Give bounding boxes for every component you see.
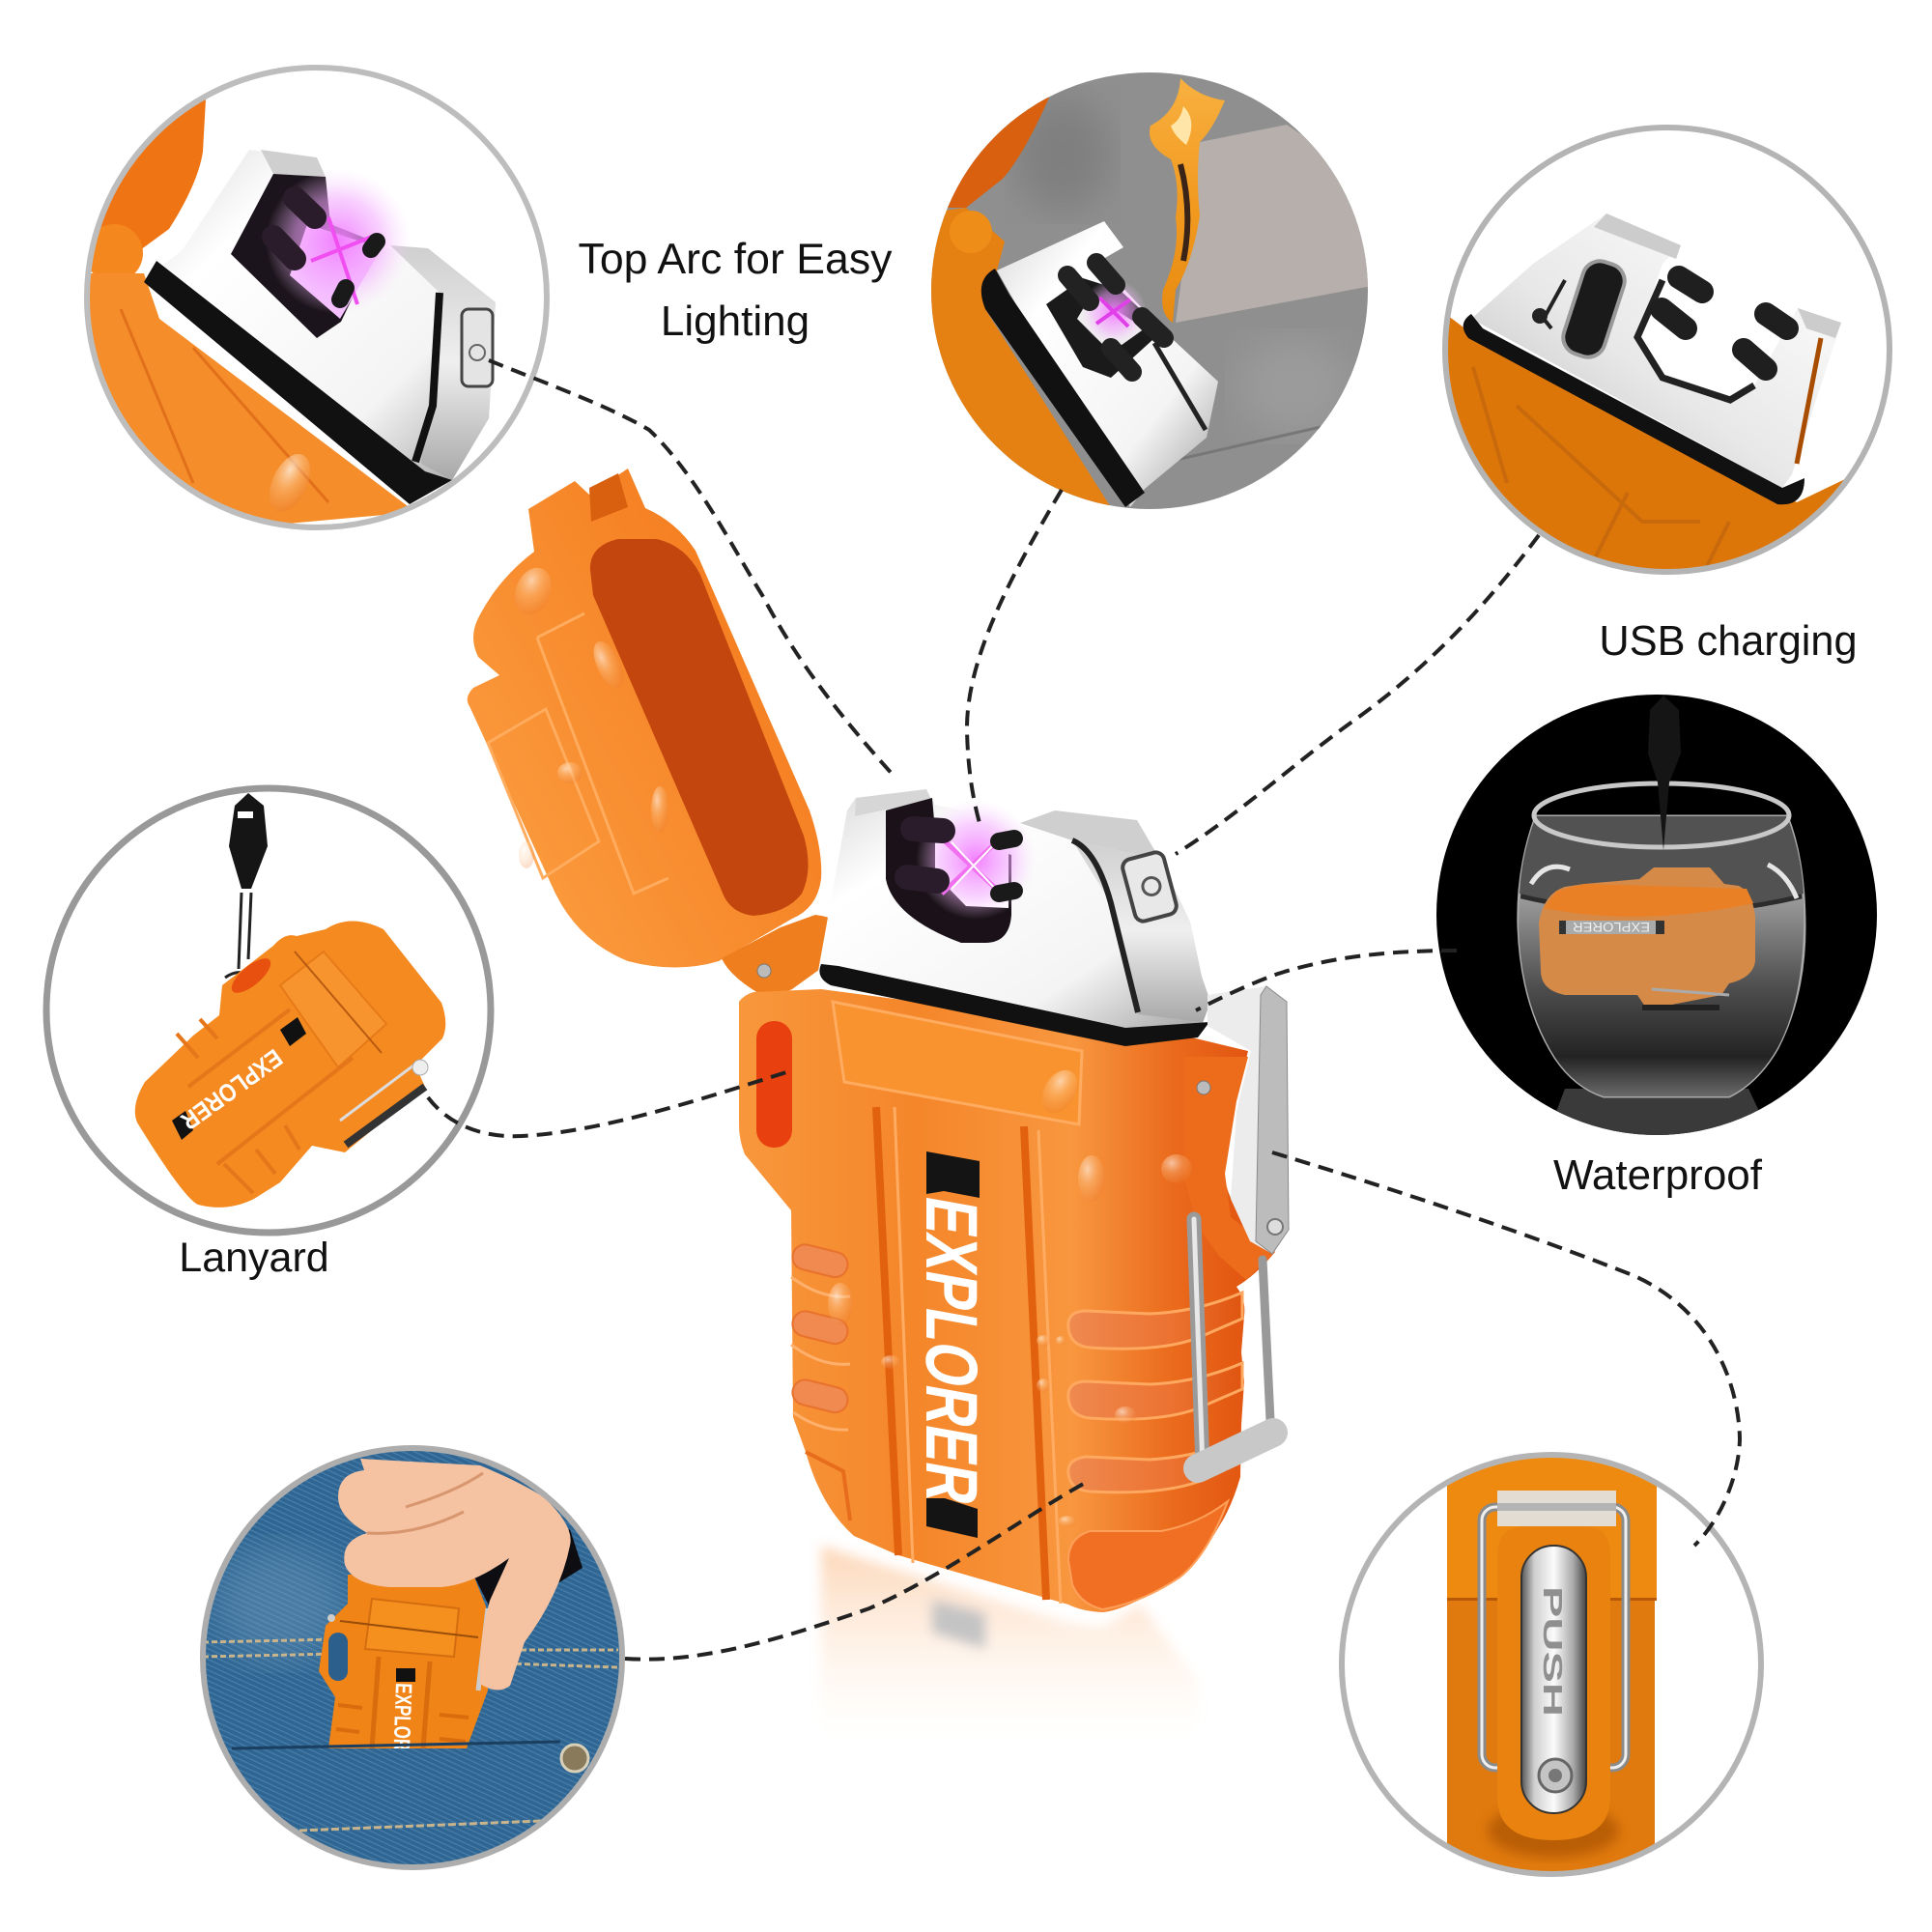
lighter body (739, 989, 1275, 1612)
chrome top with arc (818, 789, 1210, 1046)
wire loop (1482, 1507, 1626, 1768)
chrome (997, 221, 1218, 507)
dashed connector: waterproof inset (1196, 951, 1457, 1010)
lid fragment (100, 99, 206, 249)
floor reflection (821, 1546, 1198, 1739)
inset: belt clip PUSH (1342, 1449, 1761, 1880)
dashed connector: lighting inset (967, 490, 1062, 823)
gasket (819, 964, 1209, 1046)
main product: open orange lighter (468, 469, 1289, 1739)
clip tab (1497, 1526, 1610, 1840)
USB icon (1540, 280, 1565, 328)
orange case (90, 273, 408, 524)
dashed connector: USB inset (1176, 535, 1539, 854)
EXPLORER label: EXPLORER (910, 1191, 991, 1511)
electrodes (907, 829, 1014, 894)
inset: jeans pocket (193, 1439, 638, 1874)
pocket lighter (319, 1575, 488, 1751)
label: top arc: Top Arc for Easy (578, 236, 893, 283)
orange case (1448, 317, 1845, 569)
rotated lighter: EXPLORER (176, 1043, 288, 1136)
inset: top arc close-up (68, 68, 547, 541)
black belt gap (473, 1529, 582, 1613)
chrome (1471, 213, 1841, 488)
rotated lighter (135, 922, 445, 1208)
orange case (931, 208, 1110, 506)
dashed connector: lanyard inset (428, 1072, 786, 1136)
recess (231, 174, 379, 338)
left grip ribs (790, 1242, 850, 1415)
chrome (151, 150, 496, 488)
gasket (1463, 314, 1804, 504)
recess edge (1637, 280, 1754, 400)
right side face (390, 245, 496, 480)
electrodes (1662, 277, 1787, 369)
stand (1546, 1089, 1773, 1140)
glass rim (1534, 783, 1789, 847)
glass highlights (1531, 865, 1797, 898)
channels (876, 1107, 1046, 1600)
pocket edge (232, 1748, 580, 1874)
water (1519, 898, 1804, 1096)
right grip ribs (1068, 1293, 1242, 1492)
label: lighting: Lighting (661, 298, 810, 345)
hand (338, 1459, 571, 1690)
label: USB charging: USB charging (1599, 618, 1858, 665)
lanyard slot (756, 1021, 792, 1148)
label: lanyard: Lanyard (179, 1235, 329, 1281)
button (462, 309, 493, 386)
rivet (1539, 1759, 1572, 1792)
side face (1072, 840, 1210, 1022)
water droplets (509, 562, 1192, 1527)
USB port (1561, 259, 1627, 359)
submerged lighter (1539, 867, 1755, 1009)
dashed connector: clip inset (1272, 1152, 1740, 1546)
glass (1519, 816, 1804, 1096)
dashed connector: top arc inset (489, 360, 895, 777)
arc recess (886, 798, 1011, 943)
denim (193, 1439, 638, 1874)
gasket (144, 261, 452, 504)
flame (1150, 78, 1225, 323)
paper (1176, 125, 1372, 323)
hinge (722, 915, 838, 995)
embossed PUSH: PUSH (1538, 1586, 1568, 1717)
label: waterproof: Waterproof (1553, 1151, 1763, 1199)
inset: USB charging port (1439, 128, 1893, 589)
clip tab shadow (1488, 1804, 1619, 1858)
inset: waterproof glass (1436, 695, 1877, 1140)
lanyard buckle (225, 793, 268, 980)
recess (1046, 278, 1163, 378)
lanyard silhouette (1648, 696, 1681, 850)
belt clip (1184, 986, 1289, 1280)
inset: lanyard (46, 788, 491, 1233)
orange case (1447, 1449, 1657, 1600)
floor (927, 68, 1372, 522)
waist stitching (203, 1639, 618, 1667)
dashed connector: pocket inset (625, 1482, 1087, 1660)
top facets (855, 789, 932, 816)
inset: lighting paper (918, 68, 1372, 522)
lid (468, 469, 821, 968)
pocket lighter: EXPLOR (388, 1683, 416, 1751)
rivet (561, 1745, 588, 1772)
wire bail (1194, 1219, 1273, 1468)
lower corner moulding (1068, 1501, 1228, 1609)
silver pill (1521, 1546, 1586, 1813)
inset: waterproof glass: EXPLORER (1573, 920, 1650, 935)
power button (1121, 850, 1179, 923)
clip bar (1497, 1491, 1616, 1526)
lid fragment (948, 97, 1049, 208)
upper panel (833, 1002, 1082, 1124)
